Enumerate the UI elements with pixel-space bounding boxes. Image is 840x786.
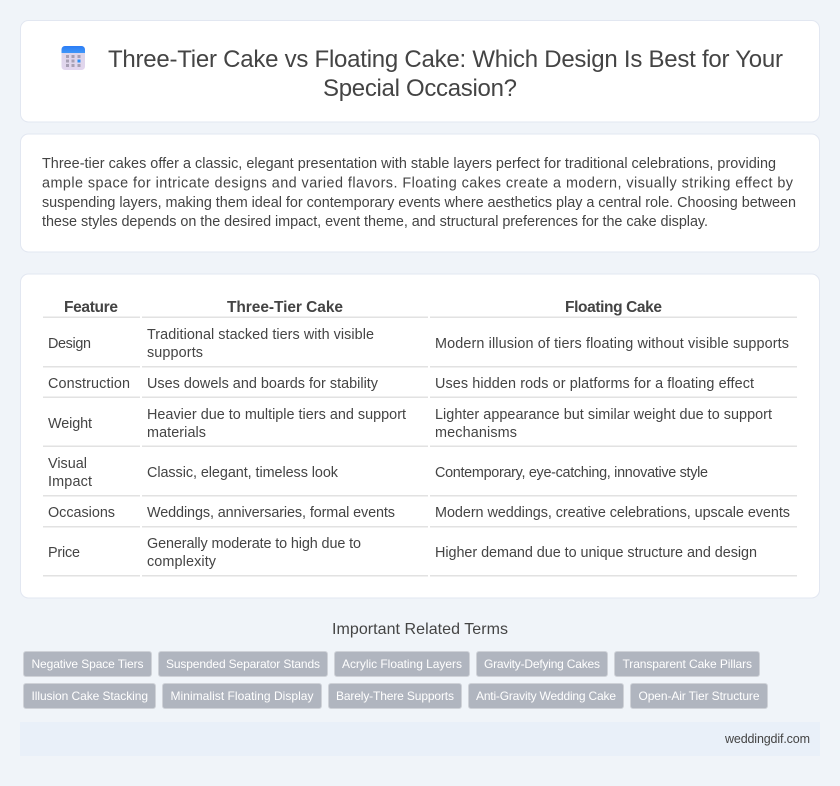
table row: visual impact: Classic, elegant, timeless look	[147, 465, 339, 481]
panel: header	[20, 20, 820, 122]
table row: design: Traditional stacked tiers with visible	[147, 327, 374, 343]
table row: weight: Heavier due to multiple tiers and support	[147, 407, 406, 423]
text block: description: Three-tier cakes offer a classic, elegant presentation with stable layers perfect for traditional celebrations, providing	[42, 156, 776, 172]
table row: occasions	[48, 505, 790, 521]
tag	[328, 684, 462, 708]
table row: weight: Weight	[48, 416, 92, 432]
table row: construction: Uses dowels and boards for stability	[147, 376, 379, 392]
table header: Feature	[64, 299, 118, 316]
table row: design: Modern illusion of tiers floating without visible supports	[435, 336, 789, 352]
tag	[162, 684, 322, 708]
table row: price	[48, 536, 757, 570]
table row: visual impact: Impact	[48, 474, 92, 490]
table row: weight: mechanisms	[435, 425, 517, 441]
tag: Gravity-Defying Cakes	[484, 657, 600, 671]
table row: construction	[48, 376, 754, 392]
tag: Transparent Cake Pillars	[622, 657, 752, 671]
tag: Acrylic Floating Layers	[342, 657, 462, 671]
table row: occasions: Occasions	[48, 505, 115, 521]
text block: description: suspending layers, making them ideal for contemporary events where aesthetics play a central role. Choosing between	[42, 195, 796, 211]
table row: weight: materials	[147, 425, 206, 441]
table header: Floating Cake	[565, 299, 662, 316]
tag	[630, 684, 768, 708]
tag	[334, 652, 470, 676]
table row: visual impact: Contemporary, eye-catching, innovative style	[435, 465, 708, 481]
panel: description	[20, 134, 820, 252]
text block: description	[42, 156, 796, 230]
table row: design	[48, 327, 789, 361]
tag	[468, 684, 624, 708]
footer: weddingdif.com	[724, 732, 810, 746]
footer	[20, 722, 820, 756]
title: Special Occasion?	[323, 75, 517, 102]
table row: occasions: Modern weddings, creative celebrations, upscale events	[435, 505, 790, 521]
table row: design: Design	[48, 336, 91, 352]
table row: visual impact	[48, 456, 708, 490]
tag: Anti-Gravity Wedding Cake	[476, 689, 616, 703]
tag	[158, 652, 328, 676]
tag: Minimalist Floating Display	[170, 689, 314, 703]
table row: occasions: Weddings, anniversaries, formal events	[147, 505, 395, 521]
table row: price: Generally moderate to high due to	[147, 536, 361, 552]
tag: Illusion Cake Stacking	[32, 689, 148, 703]
table row: price: Higher demand due to unique structure and design	[435, 545, 757, 561]
title	[108, 46, 783, 102]
tag: Barely-There Supports	[336, 689, 454, 703]
tag	[24, 652, 152, 676]
icon: calendar	[62, 46, 85, 70]
table row: price: Price	[48, 545, 80, 561]
table header: Three-Tier Cake	[227, 299, 343, 316]
text block: description: these styles depends on the desired impact, event theme, and structural preferences for the cake display.	[42, 214, 708, 230]
tag	[476, 652, 608, 676]
table header	[64, 299, 662, 316]
text block: description: ample space for intricate designs and varied flavors. Floating cakes create a modern, visually striking effect by	[42, 176, 794, 192]
tag: Open-Air Tier Structure	[638, 689, 760, 703]
table row: price: complexity	[147, 554, 217, 570]
table row: weight	[48, 407, 772, 441]
panel: comparison table	[20, 274, 820, 598]
table row: construction: Uses hidden rods or platforms for a floating effect	[435, 376, 754, 392]
tag: Negative Space Tiers	[32, 657, 144, 671]
table row: weight: Lighter appearance but similar weight due to support	[435, 407, 772, 423]
table row: visual impact: Visual	[48, 456, 87, 472]
heading: related terms: Important Related Terms	[332, 621, 508, 638]
related terms tags	[24, 652, 768, 708]
tag	[24, 684, 156, 708]
tag	[614, 652, 760, 676]
table row: construction: Construction	[48, 376, 130, 392]
title: Three-Tier Cake vs Floating Cake: Which Design Is Best for Your	[108, 46, 783, 73]
tag: Suspended Separator Stands	[166, 657, 320, 671]
table row: design: supports	[147, 345, 203, 361]
